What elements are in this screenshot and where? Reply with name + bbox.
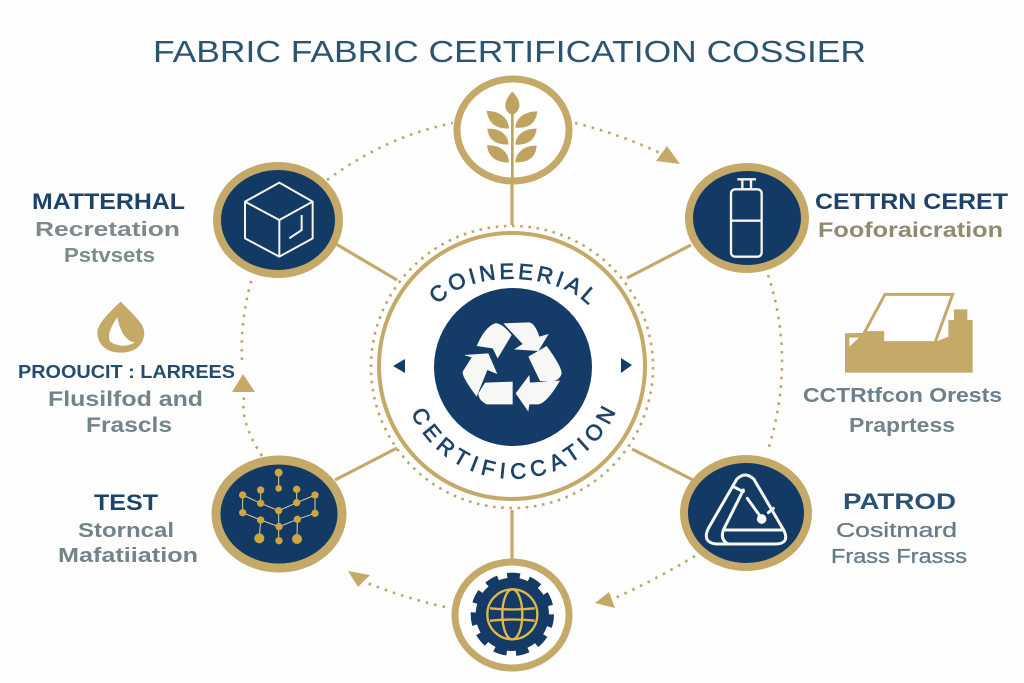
label: certain: Fooforaicration <box>818 219 1003 242</box>
label: certification costs: CCTRtfcon Orests <box>803 385 1002 407</box>
bottle disc <box>689 167 805 269</box>
label: material: Recretation <box>35 219 180 241</box>
label: patrod: PATROD <box>843 489 956 514</box>
label: product: Flusilfod and <box>48 388 203 411</box>
node: wheat <box>457 79 569 183</box>
left pointer <box>393 359 405 373</box>
triangle disc <box>684 459 808 567</box>
icon: bottle <box>731 179 762 257</box>
badge navy disc <box>434 288 592 446</box>
node: triangle process <box>684 459 808 567</box>
label: material: MATTERHAL <box>32 189 185 214</box>
icon: gear with globe <box>474 576 551 653</box>
node: material box <box>217 166 339 274</box>
connector spokes <box>335 183 695 560</box>
label: certification costs: Praprtess <box>849 415 955 437</box>
central certification badge <box>370 224 654 510</box>
icon: wheat <box>487 92 537 183</box>
icon: triangle <box>706 475 786 544</box>
icon: document tray <box>845 294 973 373</box>
curved text: certification: CERTIFICCATION <box>413 406 616 480</box>
label: patrod: Frass Frasss <box>831 546 967 568</box>
icon: drop <box>97 302 144 353</box>
label: product: PROOUCIT : LARREES <box>18 362 235 382</box>
icon: network <box>239 469 319 544</box>
badge gold ring <box>379 233 645 499</box>
dotted cycle arcs with arrows <box>232 123 782 608</box>
label: test: Mafatiiation <box>58 545 198 567</box>
icon: box <box>245 183 313 257</box>
label: test: Storncal <box>78 520 174 542</box>
label: patrod: Cositmard <box>836 520 957 542</box>
label: test <box>58 490 198 567</box>
material disc <box>217 166 339 274</box>
label: material: Pstvsets <box>64 245 155 267</box>
curved text: coineerial: COINEERIAL <box>430 263 593 306</box>
label: product <box>18 362 235 437</box>
wheat ring <box>457 79 569 181</box>
title: FABRIC FABRIC CERTIFICATION COSSIER <box>153 34 866 69</box>
gear ring <box>455 562 569 668</box>
label: test: TEST <box>94 490 159 515</box>
node: test network <box>216 460 342 568</box>
label: certification costs <box>803 385 1002 437</box>
node: gear globe <box>455 562 569 668</box>
test disc <box>216 460 342 568</box>
node: bottle <box>689 167 805 269</box>
label: certain: CETTRN CERET <box>815 189 1009 214</box>
label: patrod <box>831 489 967 568</box>
label: material <box>32 189 185 267</box>
label: certain <box>815 189 1009 242</box>
label: product: Frascls <box>86 414 172 437</box>
icon: recycle arrows <box>463 322 562 412</box>
right pointer <box>621 358 632 373</box>
badge dotted ring <box>371 226 653 508</box>
